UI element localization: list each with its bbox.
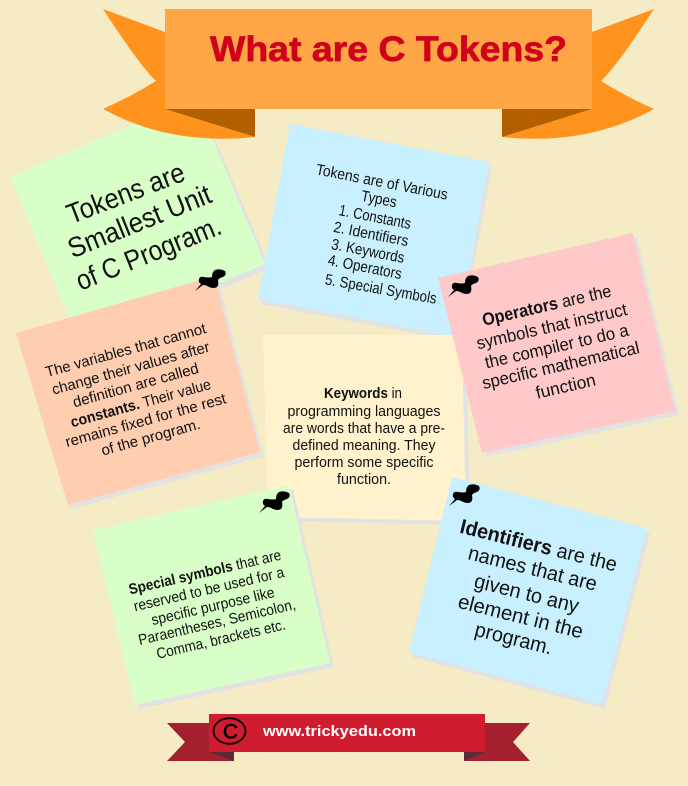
panel: identifiers note [409,477,650,709]
text: special symbols definition: specific purpose like [150,584,276,629]
text: operators definition: symbols that instruct [474,299,629,353]
text: keywords definition: defined meaning. They [292,437,436,454]
panel: operators note [438,233,679,457]
banner face [165,9,592,109]
icon: pin on identifiers note [449,484,480,506]
panel: special symbols note [93,485,334,709]
text: list of token types: 1. Constants [337,202,413,233]
text: special symbols definition: Paraentheses, Semicolon, [137,596,297,649]
text: list of token types: Types [360,188,398,211]
text: constants definition: change their values after [50,339,212,399]
text: identifiers definition: program. [472,618,555,659]
panel: keywords note [263,335,470,525]
ribbon left tail [167,723,234,761]
banner left fold [165,109,255,137]
text: identifiers definition: given to any [472,570,582,618]
website url: www.trickyedu.com [262,724,416,740]
banner right tail [502,9,654,139]
text: operators definition: function [534,370,598,403]
text: operators definition: the compiler to do a [483,320,631,372]
text: keywords definition: function. [337,471,391,488]
text: identifiers definition [456,515,619,659]
text: special symbols definition: Comma, brackets etc. [155,616,287,663]
text: identifiers definition: names that are [466,542,599,596]
text: keywords definition: Keywords in [324,385,402,402]
text: special symbols definition [127,547,297,663]
banner left tail [103,9,255,139]
banner right fold [502,109,592,137]
text: identifiers definition: Identifiers are the [458,515,619,576]
text: tokens definition: of C Program. [71,210,226,296]
text: list of token types: 3. Keywords [330,236,406,267]
text: constants definition [44,320,229,459]
panel: tokens are smallest unit note [10,98,270,347]
text: list of token types: 2. Identifiers [332,219,410,250]
panel: constants note [16,276,264,509]
text: keywords definition: perform some specific [294,454,434,471]
icon: pin on operators note [448,275,479,297]
ribbon face [209,714,485,752]
title banner [103,9,654,139]
text: operators definition: specific mathematical [480,337,641,393]
title: What are C Tokens? [210,30,567,69]
text: constants definition: of the program. [99,416,202,459]
text: constants definition: remains fixed for the rest [64,390,229,451]
ribbon left fold [209,752,234,761]
text: operators definition: Operators are the [480,281,613,330]
text: keywords definition: programming languages [288,403,440,420]
icon: pin on special symbols note [259,491,290,513]
text: tokens definition: Smallest Unit [63,178,216,264]
text: constants definition: The variables that cannot [44,320,209,381]
text: constants definition: definition are called [71,360,201,411]
text: keywords definition [283,385,445,488]
text: list of token types [314,161,449,308]
icon: copyright symbol: C [223,720,238,744]
text: list of token types: 5. Special Symbols [324,271,438,308]
panel: types of tokens note [258,124,492,342]
text: list of token types: 4. Operators [326,252,404,283]
footer ribbon [167,714,530,761]
text: keywords definition: are words that have a pre- [283,420,445,437]
text: tokens definition [62,156,226,296]
text: special symbols definition: Special symbols that are [127,547,283,598]
text: list of token types: Tokens are of Various [314,161,449,204]
text: special symbols definition: reserved to be used for a [132,564,287,615]
ribbon right fold [464,752,485,761]
icon: copyright symbol [214,718,246,744]
ribbon right tail [464,723,530,761]
text: identifiers definition: element in the [456,590,585,643]
text: constants definition: constants. Their value [69,376,213,431]
icon: pin on constants note [195,269,226,291]
text: operators definition [474,281,641,403]
text: tokens definition: Tokens are [62,156,189,230]
